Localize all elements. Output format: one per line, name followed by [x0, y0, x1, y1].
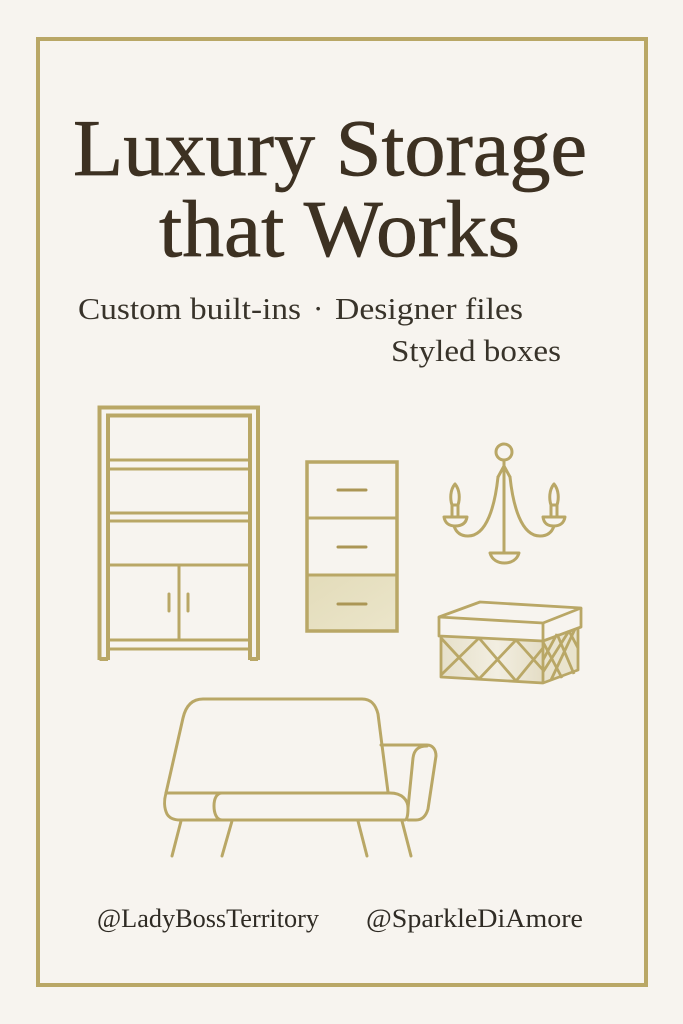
icon: lattice storage box	[439, 602, 581, 683]
subtitle: Custom built-ins	[78, 291, 301, 326]
subtitle	[78, 291, 561, 368]
icon: bookcase	[100, 408, 258, 660]
subtitle: Designer files	[335, 291, 523, 326]
social handles: @LadyBossTerritory	[97, 904, 319, 933]
icon: candle chandelier	[444, 444, 565, 563]
subtitle: ·	[313, 291, 323, 326]
title	[73, 105, 587, 274]
social handles: @SparkleDiAmore	[366, 904, 583, 933]
subtitle: Styled boxes	[391, 333, 561, 368]
title: that Works	[159, 186, 520, 274]
title: Luxury Storage	[73, 105, 587, 193]
icon: filing cabinet	[307, 462, 397, 631]
social handles	[97, 904, 583, 933]
icon: sofa	[165, 699, 436, 856]
